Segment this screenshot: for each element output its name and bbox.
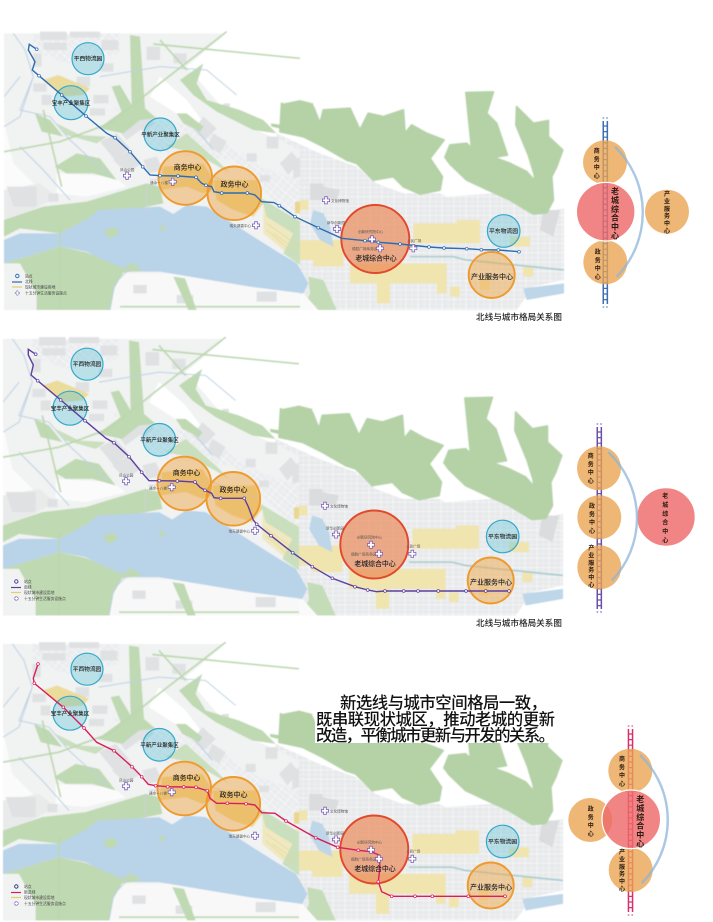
node labels: 务 — [589, 510, 595, 518]
node labels: 务 — [588, 813, 594, 821]
map labels: 平东物流园 — [489, 227, 518, 235]
panel: south line map — [3, 336, 563, 628]
node labels: 中 — [664, 220, 670, 228]
catchment circles — [54, 43, 520, 298]
node: business center — [583, 140, 627, 184]
map labels: 创新研究院中心 — [357, 840, 383, 844]
legend — [11, 884, 66, 906]
map labels: 平西物流园 — [73, 665, 102, 673]
map labels: 瑞天湖碧中心 — [230, 223, 251, 228]
map labels: 通余一八楼 — [149, 790, 167, 796]
node labels: 心 — [662, 536, 668, 544]
map labels: 商务中心 — [173, 773, 200, 782]
legend: 站点 — [24, 884, 32, 889]
node labels: 中 — [588, 822, 594, 830]
caption: 北线与城市格局关系图 — [476, 311, 562, 322]
map labels: 平新产业聚集区 — [140, 436, 179, 444]
node labels: 心 — [594, 172, 600, 180]
node labels: 务 — [619, 870, 625, 878]
node labels: 心 — [588, 830, 594, 838]
map labels: 凤山公园 — [119, 778, 134, 782]
map labels: 创新研究院中心 — [358, 229, 384, 234]
node: government center — [568, 798, 612, 842]
map labels: 瑞天湖碧中心 — [228, 834, 250, 838]
map labels: 瑞天湖碧中心 — [228, 528, 250, 534]
legend: 站点 — [24, 579, 32, 584]
legend: 站点 — [25, 274, 33, 278]
map labels: 商务中心 — [173, 468, 200, 477]
node labels: 业 — [588, 551, 594, 559]
legend: 新选线 — [24, 890, 36, 894]
map labels: 凤山公园 — [119, 472, 134, 478]
node labels: 综 — [636, 812, 644, 822]
legend: 北线 — [25, 279, 33, 284]
node labels: 产 — [588, 544, 594, 552]
node labels: 政 — [589, 502, 595, 510]
node labels: 心 — [589, 527, 595, 535]
node labels: 商 — [619, 755, 625, 763]
node labels — [594, 147, 670, 281]
node labels: 产 — [619, 848, 625, 856]
node labels: 服 — [588, 560, 594, 567]
callout text — [315, 694, 558, 745]
map labels: 凤山公园 — [120, 167, 135, 172]
node labels: 城 — [611, 195, 619, 205]
map labels: 德胜广场商务区 — [351, 552, 377, 556]
map labels: 平西物流园 — [74, 54, 103, 62]
node labels: 城 — [662, 501, 668, 509]
catchment circles — [53, 653, 519, 908]
legend — [11, 579, 66, 601]
line bar — [603, 118, 608, 307]
map labels: 宝丰产业聚集区 — [52, 99, 91, 107]
map labels — [51, 360, 517, 586]
node: industry service center — [609, 848, 653, 892]
map labels: 政务中心 — [220, 180, 248, 188]
map labels: 老城综合中心 — [355, 254, 397, 262]
node: business center — [577, 446, 621, 490]
node labels: 中 — [588, 574, 594, 582]
node: old city center — [576, 182, 635, 241]
map labels — [52, 54, 518, 281]
link arc — [608, 452, 637, 581]
node labels: 心 — [619, 885, 625, 893]
map labels: 人民广场 — [407, 238, 422, 243]
map labels: 老城综合中心 — [354, 559, 396, 568]
node labels: 商 — [594, 147, 600, 155]
caption: 北线与城市格局关系图 — [476, 617, 562, 628]
facility markers — [123, 172, 417, 252]
map labels: 文化博物馆 — [330, 504, 348, 508]
node labels: 综 — [662, 510, 668, 518]
map labels: 产业服务中心 — [470, 578, 512, 586]
node labels: 城 — [636, 803, 644, 813]
map labels: 老城综合中心 — [354, 864, 396, 873]
node labels: 中 — [619, 878, 625, 886]
route: north line — [28, 44, 520, 253]
route: new line — [33, 663, 506, 898]
node labels — [588, 755, 644, 893]
map labels: 人民广场 — [406, 848, 421, 854]
legend: 现状城市建设用地 — [25, 284, 56, 290]
node: business center — [608, 749, 652, 793]
node labels: 合 — [611, 213, 619, 223]
panel: south line diagram — [577, 424, 695, 612]
node labels: 政 — [588, 805, 594, 813]
route: south line — [28, 349, 510, 592]
map labels: 商务中心 — [174, 162, 201, 172]
legend: 现状城市建设用地 — [24, 590, 55, 595]
node labels: 中 — [589, 519, 595, 527]
map labels: 产业服务中心 — [471, 272, 513, 281]
node labels: 合 — [662, 519, 668, 527]
node labels: 老 — [662, 492, 668, 500]
node labels: 心 — [664, 227, 670, 235]
node labels: 务 — [619, 763, 625, 771]
legend: 南线 — [24, 584, 32, 590]
node labels: 务 — [594, 155, 600, 163]
node labels: 产 — [664, 190, 670, 198]
map labels: 政务中心 — [220, 790, 248, 799]
panel: new line map — [3, 642, 563, 922]
map labels: 宝丰产业聚集区 — [51, 710, 90, 718]
node labels: 心 — [619, 780, 625, 788]
line bar — [628, 726, 633, 915]
node: old city center — [602, 790, 661, 849]
map base — [3, 642, 563, 922]
node labels: 中 — [619, 772, 625, 780]
node labels: 心 — [588, 581, 594, 589]
node labels: 综 — [611, 204, 619, 214]
node labels: 心 — [595, 273, 601, 281]
node labels: 务 — [595, 256, 601, 264]
line bar — [597, 424, 602, 612]
map labels: 平东物流园 — [488, 532, 517, 540]
map labels: 德胜广场商务区 — [352, 246, 378, 251]
node labels: 心 — [636, 838, 644, 848]
link arc — [615, 147, 643, 277]
legend — [12, 274, 67, 296]
map labels: 平东物流园 — [488, 838, 517, 846]
map labels: 产业服务中心 — [470, 882, 512, 892]
callout text: 既串联现状城区，推动老城的更新 — [316, 711, 555, 729]
legend: 十五分钟生活服务设施点 — [24, 596, 66, 601]
map labels: 通余一八楼 — [150, 180, 168, 185]
node labels: 中 — [636, 830, 644, 840]
callout text: 改造，平衡城市更新与开发的关系。 — [316, 726, 555, 745]
map labels: 创新研究院中心 — [357, 534, 383, 540]
panel: north line diagram — [576, 118, 689, 307]
legend: 十五分钟生活服务设施点 — [24, 901, 66, 906]
map labels: 通余一八楼 — [149, 486, 167, 490]
panel: new line diagram — [568, 726, 668, 915]
node: government center — [583, 240, 627, 284]
map labels: 新华创新园 — [326, 830, 344, 836]
map labels: 文化博物馆 — [330, 808, 348, 814]
facility markers — [122, 783, 416, 862]
map labels: 新华创新园 — [327, 220, 345, 225]
panel: north line map — [4, 31, 564, 322]
map labels: 德胜广场商务区 — [351, 856, 377, 862]
node labels — [588, 452, 668, 589]
node: industry service center — [577, 545, 621, 589]
map base — [4, 31, 564, 311]
node labels: 中 — [594, 164, 600, 172]
catchment circles — [53, 348, 519, 604]
node labels: 务 — [664, 212, 670, 220]
map labels: 文化博物馆 — [331, 198, 349, 203]
node labels: 务 — [588, 566, 594, 574]
node labels: 服 — [619, 864, 625, 871]
node: old city center — [637, 488, 695, 546]
facility markers — [122, 478, 416, 557]
node labels: 业 — [619, 855, 625, 863]
node labels: 务 — [588, 460, 594, 468]
node: industry service center — [645, 190, 689, 234]
link arc — [640, 755, 668, 883]
node labels: 商 — [588, 452, 594, 460]
node labels: 中 — [611, 222, 619, 232]
map labels: 宝丰产业聚集区 — [51, 404, 90, 412]
legend: 十五分钟生活服务设施点 — [25, 290, 67, 296]
map labels: 平西物流园 — [73, 360, 102, 368]
map labels: 新华创新园 — [326, 526, 344, 530]
node labels: 服 — [664, 206, 670, 213]
node labels: 中 — [662, 528, 668, 536]
node labels: 合 — [636, 821, 644, 831]
map labels — [51, 665, 517, 892]
map labels: 平新产业聚集区 — [141, 130, 180, 138]
node labels: 中 — [595, 265, 601, 273]
callout text: 新选线与城市空间格局一致， — [340, 694, 547, 712]
node labels: 中 — [588, 469, 594, 477]
map labels: 政务中心 — [220, 485, 248, 494]
node labels: 政 — [595, 248, 601, 256]
node labels: 业 — [664, 197, 670, 205]
node labels: 老 — [636, 794, 644, 804]
map base — [3, 336, 563, 616]
map labels: 人民广场 — [406, 544, 421, 548]
node: government center — [577, 495, 621, 539]
node labels: 老 — [611, 186, 619, 196]
legend: 现状城市建设用地 — [24, 895, 55, 900]
node labels: 心 — [611, 230, 619, 240]
map labels: 平新产业聚集区 — [140, 741, 179, 749]
node labels: 心 — [588, 477, 594, 485]
